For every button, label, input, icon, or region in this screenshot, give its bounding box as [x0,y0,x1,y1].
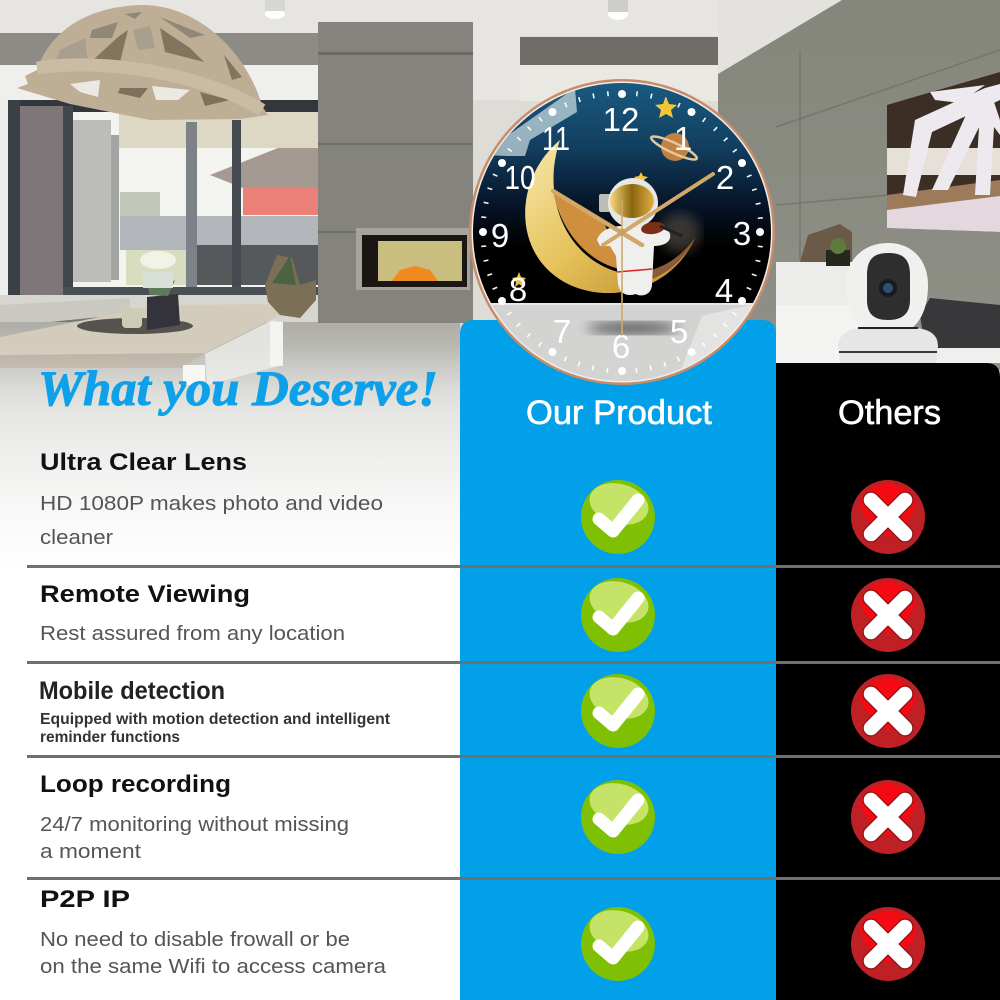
clock hands [553,174,713,335]
row: loop recording: Loop recording [40,771,231,798]
clock numerals: 7 [553,313,571,350]
row: p2p ip: on the same Wifi to access camera [40,955,387,978]
row: remote viewing: Rest assured from any location [40,622,345,645]
row: ultra clear lens [40,449,383,549]
background room photo [0,0,1000,506]
clock numerals: 4 [715,272,733,309]
row: p2p ip: No need to disable frowall or be [40,928,350,951]
row: mobile detection: Equipped with motion detection and intelligent [40,711,391,728]
clock numerals: 8 [509,271,527,308]
clock numerals: 1 [674,120,692,157]
clock numerals: 2 [716,159,734,196]
row: ultra clear lens: HD 1080P makes photo and video [40,492,383,515]
clock numerals: 5 [670,313,688,350]
table with plants [0,251,316,385]
column heading: others: Others [838,394,941,432]
astronaut [597,172,682,295]
clock numerals: 10 [504,159,536,196]
row: mobile detection: Mobile detection [39,677,225,705]
white fade over photo [0,345,460,570]
row: remote viewing [40,581,345,645]
star lower left [512,272,526,287]
row: remote viewing: Remote Viewing [40,581,250,608]
clock numerals: 9 [491,217,509,254]
security camera [838,243,938,363]
row: loop recording [40,771,349,863]
clock numerals: 11 [542,120,570,157]
clock numerals [491,101,751,365]
ceiling spot lights [265,0,628,20]
row: p2p ip [40,886,387,978]
panel: our product column [460,320,776,1000]
panel: others column [776,363,1000,1000]
moon [525,140,695,293]
row: ultra clear lens: Ultra Clear Lens [40,449,247,476]
TV screen on wall [887,72,1000,232]
green check icons [581,477,655,981]
clock numerals: 12 [603,101,639,138]
clock numerals: 6 [612,328,630,365]
tick ring [483,93,761,371]
row: ultra clear lens: cleaner [40,526,113,549]
row dividers [27,565,1000,880]
row: p2p ip: P2P IP [40,886,130,913]
clock [469,79,775,387]
star top [655,97,677,118]
row: mobile detection [39,677,391,746]
planet [649,133,699,163]
red cross icons [851,480,925,981]
row: loop recording: a moment [40,840,141,863]
column heading: our product: Our Product [526,394,713,432]
hour markers [479,90,764,375]
pendant lamp [17,5,268,120]
title: What you Deserve! [38,360,438,416]
clock numerals: 3 [733,215,751,252]
row: mobile detection: reminder functions [40,729,180,746]
row: loop recording: 24/7 monitoring without missing [40,813,349,836]
